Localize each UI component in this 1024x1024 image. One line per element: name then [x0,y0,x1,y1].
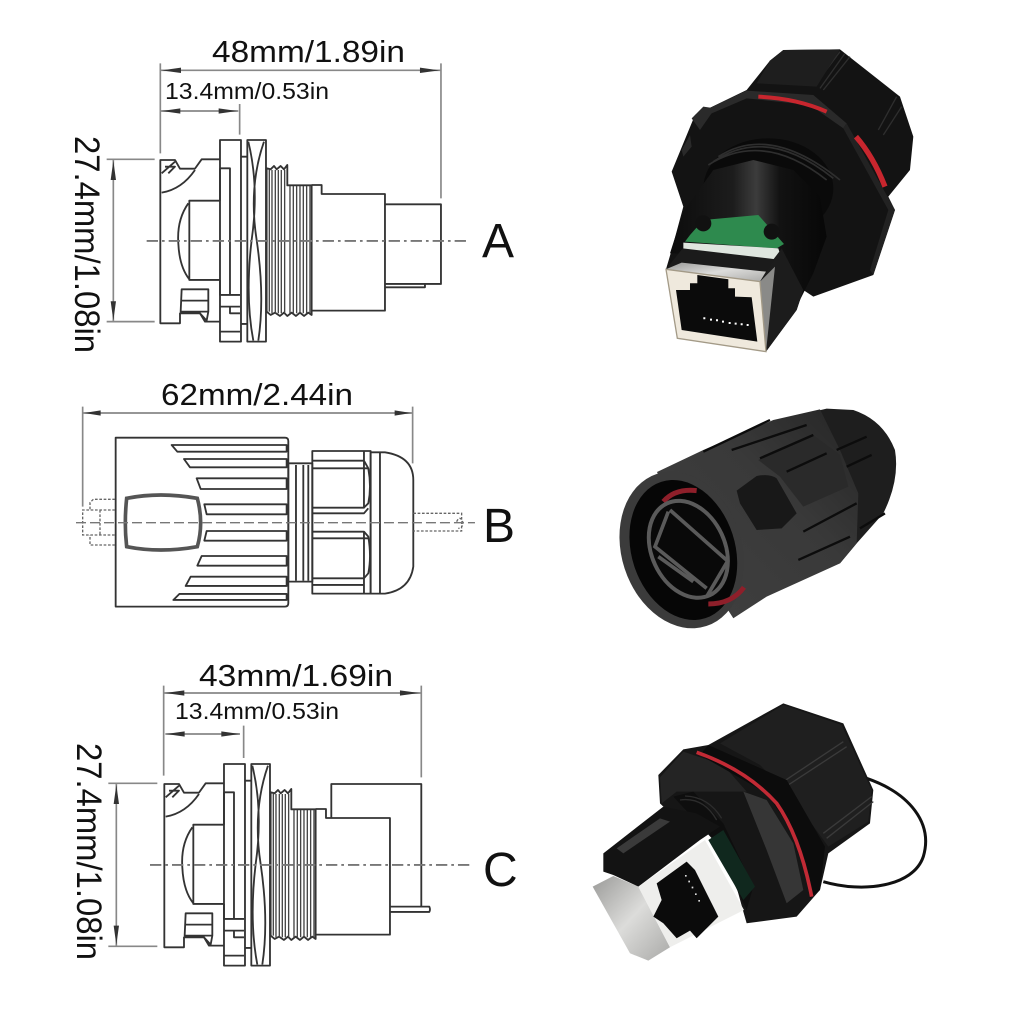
ribs [172,445,287,600]
label: 27.4mm: 27.4mm/1.08in [69,743,108,960]
flange facet [660,752,747,803]
red gasket [758,97,827,112]
band segment [758,435,848,507]
letter A: A [482,215,514,268]
screw post [682,107,715,157]
technical drawing B [76,377,475,607]
connector outline A [147,140,468,342]
dimension lines B [83,407,413,507]
barrel [603,807,720,887]
neck [288,463,312,582]
technical drawing C [69,658,473,966]
cap dome [800,409,896,563]
nut [312,451,371,594]
jack [653,862,718,938]
thread [673,792,753,910]
cable [823,778,926,887]
front rim [600,455,763,645]
letter B: B [483,500,515,553]
label: 13.4mm: 13.4mm/0.53in [165,78,329,104]
pcb [685,215,784,248]
window [125,495,201,550]
cap [371,452,413,594]
product photo C [593,703,926,961]
jack [676,275,757,342]
red gasket [697,752,812,897]
ribs [703,420,885,560]
hidden cable [83,499,463,545]
metal top [666,248,782,282]
silhouette [666,49,913,352]
rear nut facet [720,705,872,847]
barrel [670,160,827,307]
technical drawing A [67,34,468,353]
connector outline C [150,764,473,966]
label: 27.4mm: 27.4mm/1.08in [67,136,106,353]
label: 48mm: 48mm/1.89in [212,34,405,69]
silhouette [658,703,873,923]
metal front [638,840,744,947]
connector outline B [76,438,475,607]
inner ring [634,488,743,611]
metal side [593,876,670,961]
dimension lines C [108,686,421,946]
grip patch [737,475,797,530]
body [657,409,858,618]
flange rim [695,91,847,128]
product photo B [600,409,896,645]
metal front [666,269,766,352]
red ring [663,490,744,604]
pcb [708,830,755,900]
metal side [760,248,803,352]
label: 13.4mm: 13.4mm/0.53in [175,698,339,724]
shared front section C [164,764,316,966]
shared front section A [160,140,312,342]
thread rings [703,138,833,238]
black band [700,745,825,898]
letter C: C [483,844,518,897]
label: 62mm: 62mm/2.44in [161,377,353,412]
dimension lines A [107,63,441,322]
product photo A [666,49,913,352]
rear nut grooves [815,52,902,135]
label: 43mm: 43mm/1.69in [199,658,393,693]
